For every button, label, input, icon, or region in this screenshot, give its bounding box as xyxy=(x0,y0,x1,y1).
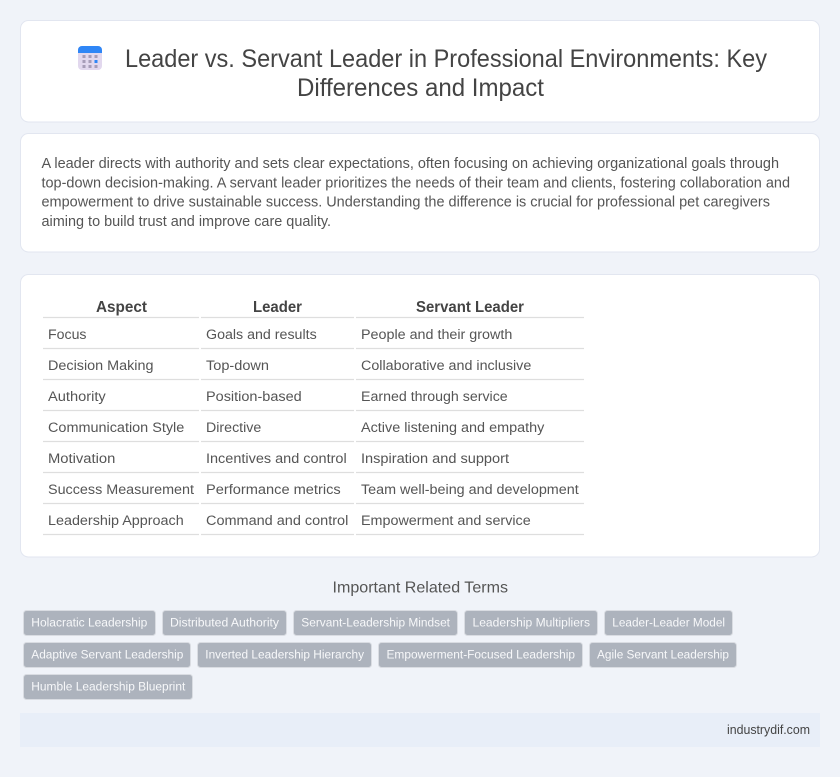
tag: inverted leadership hierarchy xyxy=(198,642,372,668)
panel: comparison table xyxy=(20,274,820,557)
tag: adaptive servant leadership: Adaptive Servant Leadership xyxy=(31,648,184,662)
intro paragraph: A leader directs with authority and sets clear expectations, often focusing on achieving organizational goals through xyxy=(42,156,779,172)
row: leadership approach: Leadership Approach xyxy=(48,513,184,529)
icon: calendar xyxy=(78,46,102,70)
row: success measurement: Success Measurement xyxy=(48,482,194,498)
table header row: Leader xyxy=(253,299,302,316)
title: Differences and Impact xyxy=(297,74,544,102)
table header row xyxy=(96,299,524,316)
tag: leader-leader model xyxy=(604,610,732,636)
tag: adaptive servant leadership xyxy=(24,642,190,668)
row: communication style xyxy=(48,420,545,436)
title: Leader vs. Servant Leader in Professional Environments: Key xyxy=(125,45,767,73)
tag: empowerment-focused leadership xyxy=(378,642,582,668)
row: authority: Earned through service xyxy=(361,389,508,405)
table header row: Aspect xyxy=(96,299,147,316)
tag: agile servant leadership xyxy=(590,642,736,668)
table header row: Servant Leader xyxy=(416,299,524,316)
row: authority: Authority xyxy=(48,389,107,405)
row: motivation: Motivation xyxy=(48,451,115,467)
tag: servant-leadership mindset: Servant-Leadership Mindset xyxy=(301,616,451,630)
row: authority: Position-based xyxy=(206,389,302,405)
row: communication style: Directive xyxy=(206,420,261,436)
row: decision making: Decision Making xyxy=(48,358,154,374)
tag: holacratic leadership: Holacratic Leadership xyxy=(31,616,148,630)
row: success measurement xyxy=(48,482,579,498)
tag: leader-leader model: Leader-Leader Model xyxy=(612,616,725,630)
row: leadership approach: Empowerment and service xyxy=(361,513,531,529)
row: success measurement: Team well-being and development xyxy=(361,482,579,498)
tag: leadership multipliers xyxy=(464,610,598,636)
title xyxy=(125,45,767,102)
tag: humble leadership blueprint: Humble Leadership Blueprint xyxy=(31,680,186,694)
row: leadership approach: Command and control xyxy=(206,513,348,529)
row: decision making: Top-down xyxy=(206,358,269,374)
intro paragraph: empowerment to drive sustainable success. Understanding the difference is crucial for professional pet caregivers xyxy=(42,195,770,211)
tag: agile servant leadership: Agile Servant Leadership xyxy=(597,648,729,662)
footer bar xyxy=(20,713,820,747)
tag: distributed authority: Distributed Authority xyxy=(170,616,280,630)
row: decision making: Collaborative and inclusive xyxy=(361,358,531,374)
intro paragraph: top-down decision-making. A servant leader prioritizes the needs of their team and clients, fostering collaboration and xyxy=(42,175,790,191)
row: motivation: Inspiration and support xyxy=(361,451,509,467)
row: motivation xyxy=(48,451,509,467)
tag: holacratic leadership xyxy=(24,610,156,636)
tag: leadership multipliers: Leadership Multipliers xyxy=(472,616,590,630)
heading: important related terms: Important Related Terms xyxy=(332,580,508,597)
intro paragraph: aiming to build trust and improve care quality. xyxy=(42,214,331,230)
footer source text: industrydif.com xyxy=(727,723,810,737)
tag: humble leadership blueprint xyxy=(24,674,192,700)
row: success measurement: Performance metrics xyxy=(206,482,341,498)
tag: distributed authority xyxy=(162,610,286,636)
tag: empowerment-focused leadership: Empowerment-Focused Leadership xyxy=(386,648,575,662)
row: decision making xyxy=(48,358,531,374)
tag: servant-leadership mindset xyxy=(294,610,458,636)
row: focus: People and their growth xyxy=(361,327,512,343)
row: leadership approach xyxy=(48,513,531,529)
row: motivation: Incentives and control xyxy=(206,451,347,467)
row: focus xyxy=(48,327,512,343)
row: communication style: Communication Style xyxy=(48,420,184,436)
row: communication style: Active listening and empathy xyxy=(361,420,545,436)
row: focus: Goals and results xyxy=(206,327,317,343)
panel: title header xyxy=(20,20,820,122)
row: authority xyxy=(48,389,508,405)
panel: introduction xyxy=(20,134,820,252)
related term tags xyxy=(24,610,736,700)
row: focus: Focus xyxy=(48,327,86,343)
intro paragraph xyxy=(42,156,790,230)
tag: inverted leadership hierarchy: Inverted Leadership Hierarchy xyxy=(205,648,365,662)
